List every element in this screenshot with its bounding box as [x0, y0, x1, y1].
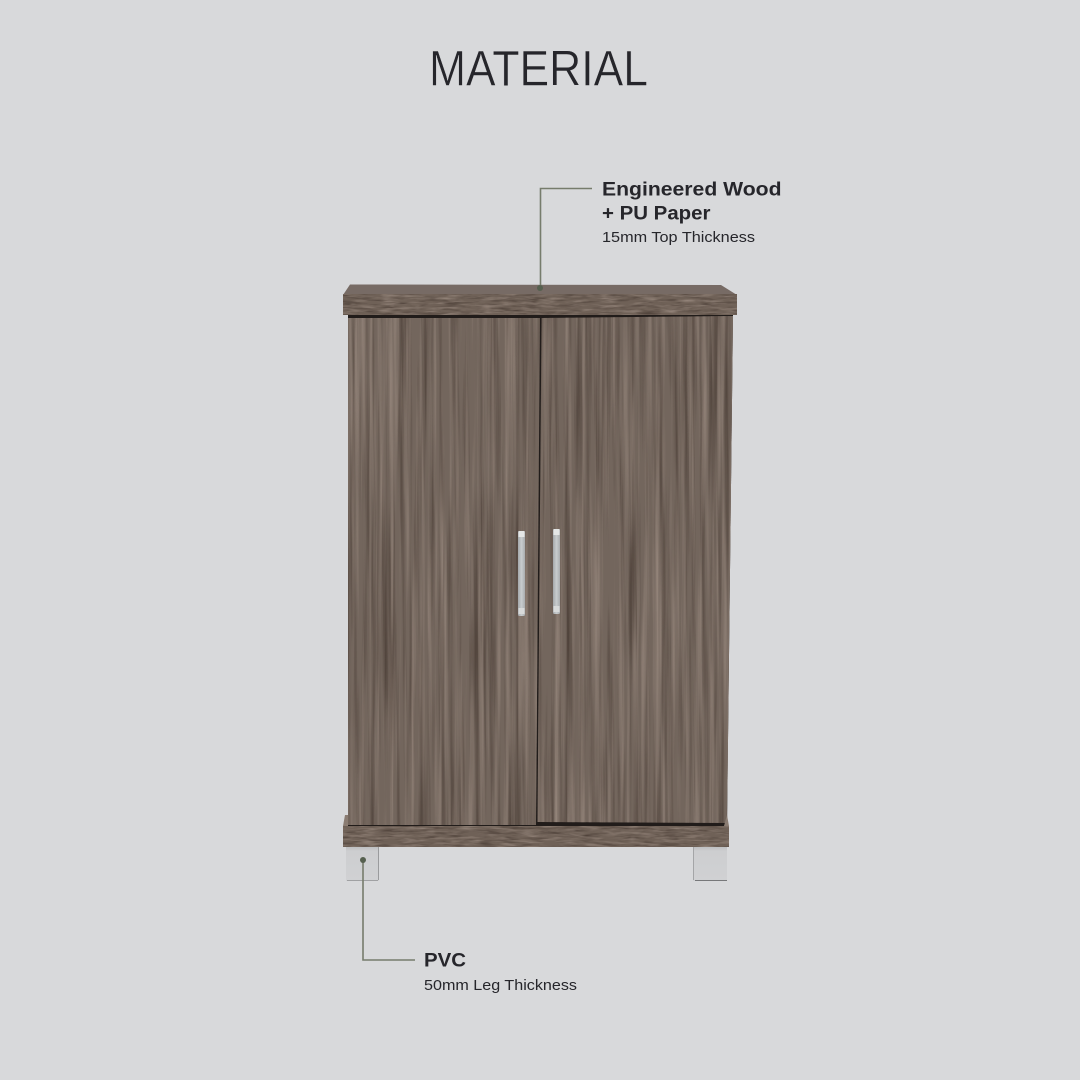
right door — [538, 316, 733, 823]
leader dot: top — [537, 285, 543, 291]
left door handle — [518, 531, 525, 616]
leader dot: bottom — [360, 857, 366, 863]
leader line: bottom — [363, 860, 415, 960]
label: engineered wood heading: Engineered Wood — [602, 178, 782, 200]
bottom plinth — [343, 815, 729, 847]
callout: PVC — [360, 857, 577, 994]
label: engineered wood heading: + PU Paper — [602, 202, 711, 224]
label: leg thickness: 50mm Leg Thickness — [424, 977, 577, 994]
label: top thickness: 15mm Top Thickness — [602, 229, 755, 246]
label: PVC heading: PVC — [424, 950, 466, 972]
right door handle — [553, 529, 560, 614]
callout: engineered wood — [537, 178, 782, 291]
left door — [348, 318, 540, 825]
cabinet legs — [346, 847, 727, 881]
cabinet illustration — [343, 284, 737, 881]
cabinet body shadow — [348, 315, 733, 826]
title: MATERIAL — [429, 40, 648, 96]
top panel surface — [343, 284, 737, 295]
label: engineered wood heading — [602, 178, 782, 224]
leader line: top — [540, 188, 592, 288]
top panel front edge — [343, 294, 737, 315]
